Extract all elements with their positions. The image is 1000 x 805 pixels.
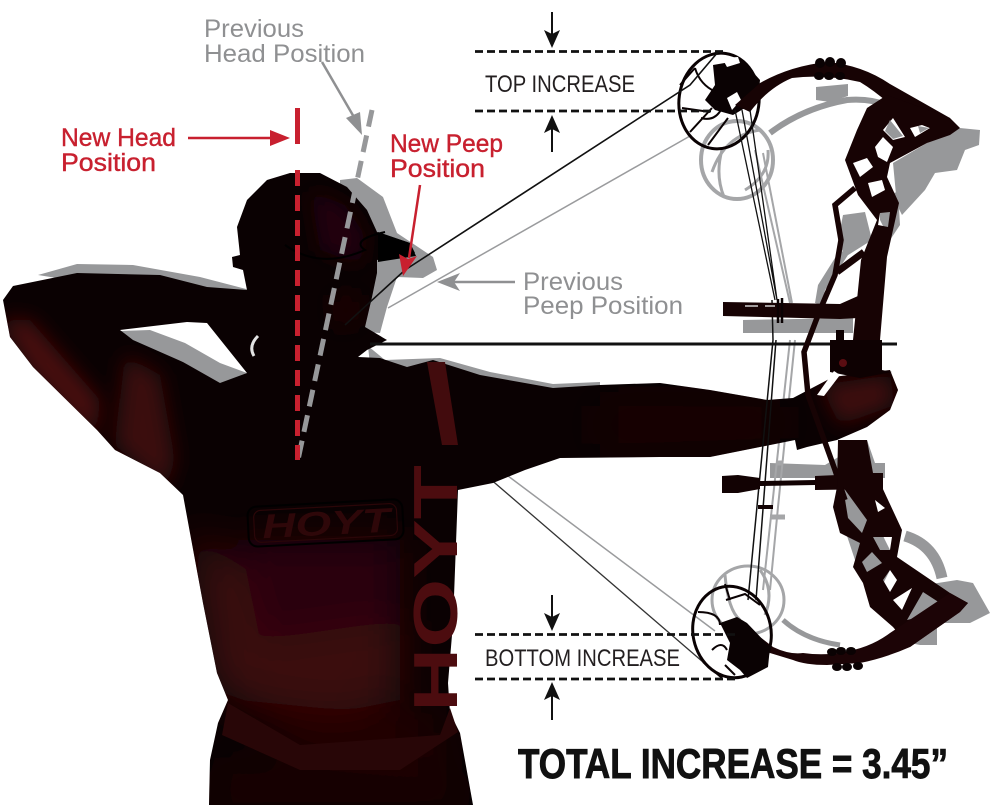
shirt side print (402, 362, 471, 712)
arrow: top increase up (544, 115, 560, 152)
arrow: previous peep (437, 273, 515, 291)
label: previous peep position: Previous (523, 268, 623, 296)
label: previous peep position: Peep Position (523, 292, 683, 320)
label: previous head position: Head Position (204, 40, 365, 68)
lower stabilizer rod (722, 473, 883, 509)
grey previous string (388, 136, 715, 631)
riser truss (804, 188, 855, 500)
upper stabilizer rod (723, 296, 858, 323)
label: previous head position: Previous (204, 15, 304, 43)
arrow: new peep (399, 185, 420, 276)
top riser (804, 95, 960, 500)
limb pads (827, 647, 863, 671)
previous bow shadow (701, 84, 990, 645)
dimension lines: top increase (475, 52, 727, 111)
top limb (735, 57, 950, 132)
shirt side print: HOYT (402, 465, 471, 712)
shadow: previous archer position (38, 178, 600, 395)
shadow: previous bottom cam (712, 566, 784, 634)
black string and cables, top (345, 52, 777, 600)
label: new head position: New Head (61, 124, 176, 152)
limb pads (814, 57, 846, 80)
top cam (673, 48, 765, 154)
previous head position dashed line (298, 110, 372, 460)
label: new head position: Position (61, 149, 156, 177)
bottom limb (745, 593, 968, 671)
shadow: previous lower riser (838, 485, 895, 590)
body shading (0, 190, 895, 805)
new head position dashed line (295, 108, 300, 460)
shadow: previous top cam (701, 121, 773, 199)
cap underside line (285, 232, 385, 259)
body base (3, 173, 898, 805)
shirt chest logo (247, 499, 404, 547)
shadow: previous lower limb (783, 620, 840, 645)
arrow shaft (370, 342, 897, 346)
bottom cam (684, 579, 780, 685)
arrow: new head (188, 130, 290, 146)
grey inside riser windows (885, 120, 903, 139)
lower string (460, 453, 703, 662)
release hand highlight (252, 336, 258, 356)
label: top increase: TOP INCREASE (485, 71, 635, 98)
arrow: bottom increase down (544, 595, 560, 631)
label: new peep position: New Peep (390, 130, 503, 158)
lower riser (833, 440, 968, 647)
arrow: previous head (322, 62, 362, 135)
arrow: top increase down (544, 12, 560, 48)
shadow: previous lower stabilizer (770, 440, 885, 478)
shadow: previous top limb (770, 100, 890, 133)
belt (222, 703, 458, 770)
shirt chest logo: HOYT (261, 501, 395, 546)
brim (378, 232, 416, 262)
dimension lines: bottom increase (475, 634, 735, 679)
label: new peep position: Position (390, 155, 485, 183)
archer silhouette (0, 173, 898, 805)
shadow: previous riser tip (893, 128, 980, 215)
label: bottom increase: BOTTOM INCREASE (485, 645, 680, 672)
grip window (817, 371, 840, 396)
sight and grip block (830, 330, 892, 378)
shadow: previous upper stabilizer (743, 318, 853, 333)
shadow: previous cables (755, 150, 795, 590)
arrow: bottom increase up (544, 682, 560, 720)
